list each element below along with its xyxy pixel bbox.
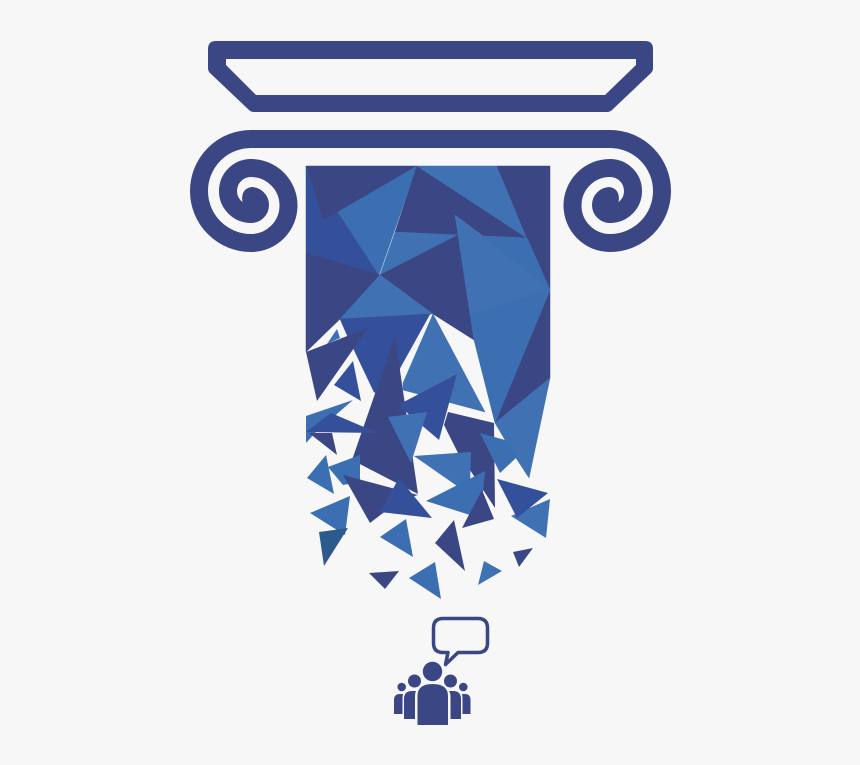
icon: group of people bbox=[394, 662, 470, 725]
right volute bbox=[430, 139, 662, 243]
column shaft: shattering fragments bbox=[306, 328, 550, 599]
column shaft: intact faceted upper part bbox=[306, 166, 550, 478]
left volute bbox=[199, 139, 431, 243]
capital scroll band with volutes bbox=[199, 139, 662, 243]
column cap (abacus) bbox=[208, 41, 653, 112]
icon: speech bubble bbox=[434, 618, 488, 664]
